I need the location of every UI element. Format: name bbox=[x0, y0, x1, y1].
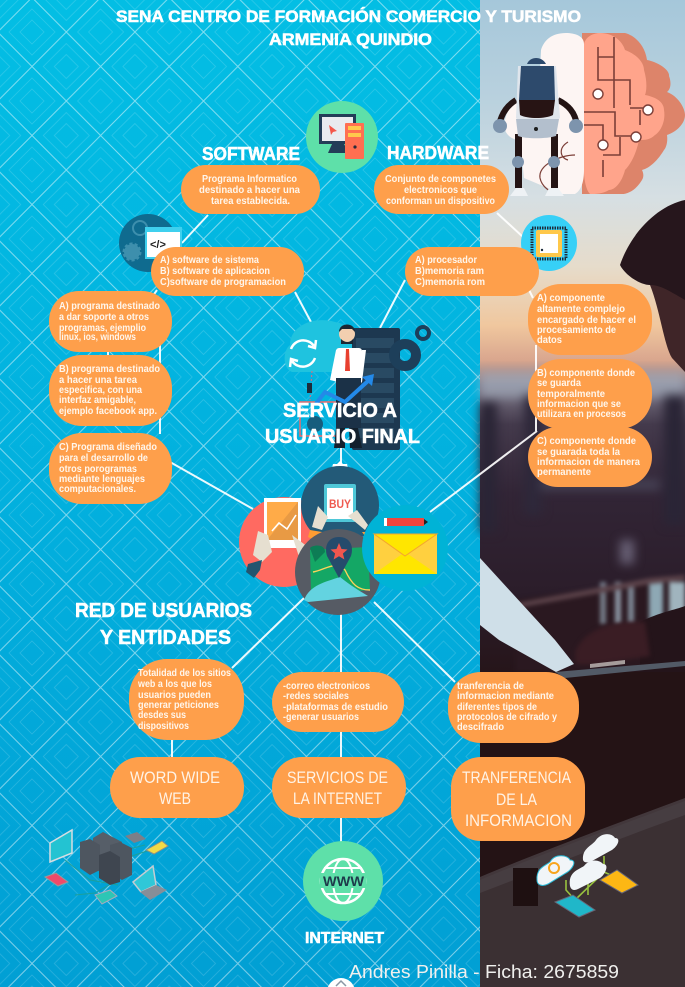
panel: software types list: B) software de aplicacion bbox=[160, 266, 270, 277]
panel: internet services description: -plataformas de estudio bbox=[283, 702, 388, 713]
icon: tablet chart bbox=[239, 497, 329, 587]
panel: hardware component A: procesamiento de bbox=[537, 325, 616, 336]
panel: hardware components list: A) procesador bbox=[415, 255, 477, 266]
icon: www globe: WWW bbox=[323, 873, 365, 889]
panel: tranferencia de la informacion bbox=[451, 757, 585, 841]
icon: cloud network devices bbox=[537, 834, 638, 917]
panel: software type C bbox=[49, 433, 172, 504]
heading: servicio a usuario final: SERVICIO A bbox=[283, 400, 397, 422]
title bbox=[116, 7, 581, 49]
panel: word wide web: WORD WIDE bbox=[130, 769, 220, 787]
panel: hardware components list: B)memoria ram bbox=[415, 266, 484, 277]
panel: software type B: especifica, con una bbox=[59, 385, 142, 396]
panel: information transfer description bbox=[448, 672, 579, 743]
panel: software type A: A) programa destinado bbox=[59, 301, 160, 312]
panel: software definition: destinado a hacer una bbox=[199, 185, 300, 196]
panel: hardware definition: Conjunto de componetes bbox=[385, 174, 496, 185]
panel: hardware component A bbox=[528, 284, 652, 355]
panel: hardware component C bbox=[528, 427, 652, 487]
panel: software type A: programas, ejemplio bbox=[59, 323, 146, 334]
icon: shopping tablet buy: BUY bbox=[329, 497, 351, 511]
title: SENA CENTRO DE FORMACIÓN COMERCIO Y TURISMO bbox=[116, 7, 581, 26]
connector lines bbox=[108, 213, 537, 842]
icon: email envelope bbox=[362, 505, 448, 591]
heading: servicio a usuario final: USUARIO FINAL bbox=[265, 426, 420, 448]
panel: world wide web description: generar peticiones bbox=[138, 700, 219, 711]
panel: software type C: C) Programa diseñado bbox=[59, 442, 157, 453]
icon cluster: user network bbox=[239, 461, 448, 615]
heading: red de usuarios y entidades: Y ENTIDADES bbox=[100, 627, 231, 649]
illustration: man and server, user service bbox=[285, 320, 429, 450]
panel: software type B: a hacer una tarea bbox=[59, 375, 137, 386]
background: blue diamond pattern panel bbox=[0, 0, 481, 987]
panel: hardware component B bbox=[528, 359, 652, 429]
panel: world wide web description: desdes sus bbox=[138, 710, 186, 721]
background: photo of person on laptop at dusk bbox=[480, 0, 685, 987]
panel: hardware component C: permanente bbox=[537, 467, 591, 478]
panel: tranferencia de la informacion: INFORMACION bbox=[465, 812, 572, 830]
panel: servicios de la internet: SERVICIOS DE bbox=[287, 769, 388, 787]
panel: information transfer description: diferentes tipos de bbox=[457, 702, 537, 713]
panel: software type A: a dar soporte a otros bbox=[59, 312, 149, 323]
panel: hardware component B: se guarda bbox=[537, 378, 581, 389]
panel: hardware component B: utilizara en procesos bbox=[537, 409, 626, 420]
author credit: Andres Pinilla - Ficha: 2675859 bbox=[349, 962, 619, 982]
panel: hardware component C: se guarada toda la bbox=[537, 447, 620, 458]
panel: internet services description: -redes sociales bbox=[283, 691, 349, 702]
panel: hardware component C: C) componente donde bbox=[537, 436, 636, 447]
panel: information transfer description: tranferencia de bbox=[457, 681, 524, 692]
panel: software type B: interfaz amigable, bbox=[59, 395, 136, 406]
panel: software type A bbox=[49, 291, 172, 352]
panel: tranferencia de la informacion: TRANFERENCIA bbox=[462, 769, 571, 787]
heading: internet: INTERNET bbox=[305, 930, 385, 947]
panel: hardware components list: C)memoria rom bbox=[415, 277, 485, 288]
panel: hardware component C: informacion de manera bbox=[537, 457, 640, 468]
panel: information transfer description: informacion mediante bbox=[457, 691, 554, 702]
panel: software definition bbox=[181, 165, 320, 214]
panel: hardware definition: electronicos que bbox=[404, 185, 477, 196]
illustration: robot and brain bbox=[493, 33, 685, 196]
panel: hardware component A: encargado de hacer el bbox=[537, 315, 636, 326]
icon: code window with gears bbox=[119, 214, 181, 272]
panel: tranferencia de la informacion: DE LA bbox=[496, 791, 537, 809]
panel: world wide web description bbox=[129, 659, 244, 740]
panel: internet services description: -correo electronicos bbox=[283, 681, 370, 692]
heading: red de usuarios y entidades: RED DE USUARIOS bbox=[75, 600, 252, 622]
panel: software type C: para el desarrollo de bbox=[59, 453, 148, 464]
panel: servicios de la internet bbox=[272, 757, 406, 818]
panel: hardware component B: B) componente donde bbox=[537, 368, 635, 379]
panel: software definition: Programa Informatico bbox=[202, 174, 297, 185]
heading: software: SOFTWARE bbox=[202, 144, 300, 164]
icon: desktop computer bbox=[306, 101, 378, 173]
panel: information transfer description: protocolos de cifrado y bbox=[457, 712, 557, 723]
panel: internet services description: -generar usuarios bbox=[283, 712, 359, 723]
panel: hardware component A: datos bbox=[537, 335, 562, 346]
panel: hardware component B: temporalmente bbox=[537, 389, 605, 400]
icon: bottom white badge bbox=[327, 978, 355, 987]
panel: world wide web description: usuarios pueden bbox=[138, 690, 211, 701]
panel: hardware component B: informacion que se bbox=[537, 399, 621, 410]
icon: www globe bbox=[303, 841, 383, 921]
title: ARMENIA QUINDIO bbox=[269, 30, 432, 49]
panel: hardware component A: A) componente bbox=[537, 293, 605, 304]
panel: world wide web description: web a los que los bbox=[137, 679, 212, 690]
panel: internet services description bbox=[272, 672, 404, 732]
panel: software type C: mediante lenguajes bbox=[59, 474, 145, 485]
panel: hardware definition bbox=[374, 165, 509, 214]
panel: software definition: tarea establecida. bbox=[211, 196, 290, 207]
panel: world wide web description: dispositivos bbox=[138, 721, 189, 732]
panel: software types list: C)software de programacion bbox=[160, 277, 286, 288]
panel: software type C: otros porogramas bbox=[59, 464, 137, 475]
panel: information transfer description: descifrado bbox=[457, 722, 504, 733]
panel: software type C: computacionales. bbox=[59, 484, 136, 495]
heading: servicio a usuario final bbox=[265, 400, 420, 448]
icon: shopping tablet buy bbox=[301, 461, 379, 544]
panel: servicios de la internet: LA INTERNET bbox=[293, 790, 382, 808]
panel: hardware component A: altamente complejo bbox=[537, 304, 625, 315]
icon: map pin bbox=[295, 529, 381, 615]
heading: hardware: HARDWARE bbox=[387, 143, 489, 163]
panel: hardware components list bbox=[405, 247, 539, 296]
icon: code window with gears: </> bbox=[150, 239, 166, 251]
panel: word wide web: WEB bbox=[159, 790, 191, 808]
icon: isometric servers and devices bbox=[45, 830, 168, 904]
panel: software type B: ejemplo facebook app. bbox=[59, 406, 157, 417]
panel: software types list bbox=[151, 247, 304, 296]
panel: world wide web description: Totalidad de los sitios bbox=[138, 668, 231, 679]
panel: word wide web bbox=[110, 757, 244, 818]
heading: red de usuarios y entidades bbox=[75, 600, 252, 649]
panel: software types list: A) software de sistema bbox=[160, 255, 259, 266]
icon: processor chip bbox=[521, 215, 577, 271]
panel: software type B bbox=[49, 355, 172, 426]
panel: software type B: B) programa destinado bbox=[59, 364, 160, 375]
panel: hardware definition: conforman un dispositivo bbox=[386, 196, 495, 207]
panel: software type A: linux, ios, windows bbox=[59, 332, 136, 343]
